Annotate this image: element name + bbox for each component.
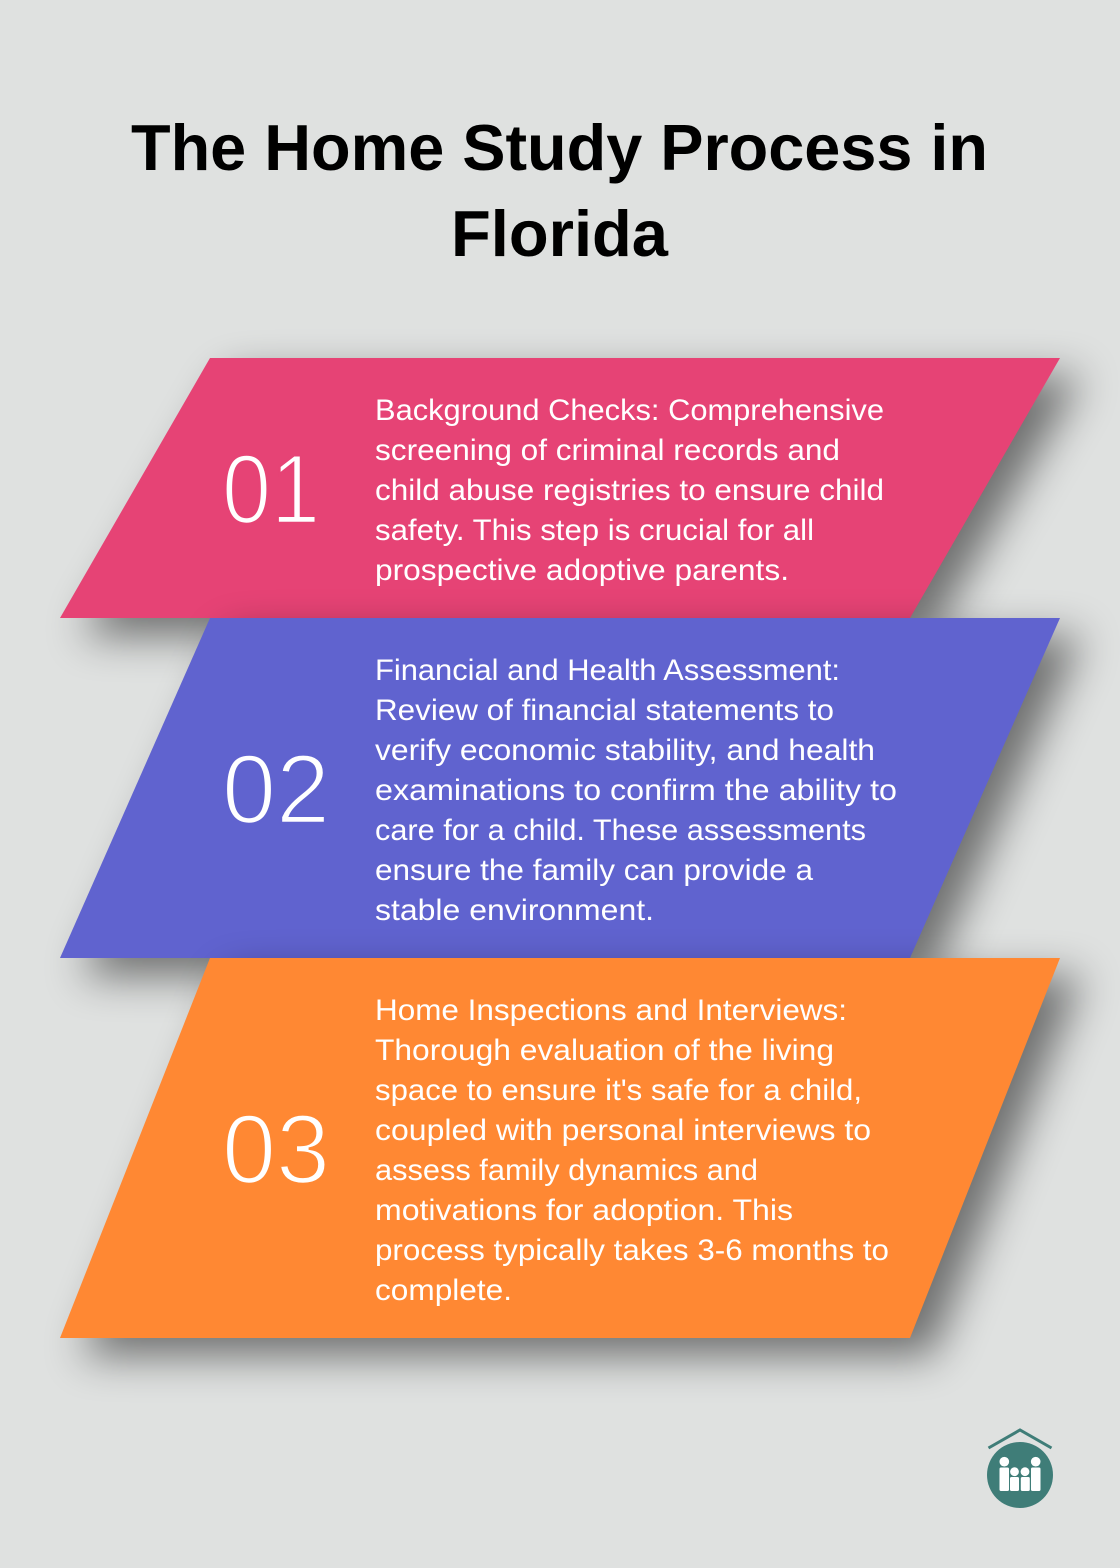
text: step 3 description: Home Inspections and Interviews:: [375, 994, 847, 1027]
text: step 2 description: Financial and Health Assessment:: [375, 654, 840, 687]
shape: blue parallelogram: [60, 618, 1060, 958]
text: step 1 description: prospective adoptive parents.: [375, 554, 789, 587]
text: step 2 description: [375, 654, 897, 927]
shape: pink parallelogram: [60, 358, 1060, 618]
text: step 2 description: examinations to confirm the ability to: [375, 774, 897, 807]
text: step 2 description: stable environment.: [375, 894, 654, 927]
text: step 1 description: safety. This step is crucial for all: [375, 514, 814, 547]
text: step 1 description: [375, 394, 884, 587]
title: The Home Study Process in: [131, 111, 988, 184]
icon: family home logo: [987, 1430, 1053, 1508]
text: step 3 description: space to ensure it's safe for a child,: [375, 1074, 862, 1107]
text: step 3 description: coupled with personal interviews to: [375, 1114, 871, 1147]
panel: step 1 background checks: [60, 358, 1082, 636]
title: Florida: [451, 197, 669, 270]
text: step 2 description: care for a child. These assessments: [375, 814, 866, 847]
text: step 3 description: motivations for adoption. This: [375, 1194, 793, 1227]
text: step 1 description: Background Checks: Comprehensive: [375, 394, 884, 427]
panel: step 2 financial and health assessment: [60, 618, 1082, 976]
text: step 3 description: process typically takes 3-6 months to: [375, 1234, 889, 1267]
text: step 3 description: complete.: [375, 1274, 512, 1307]
text: step 1 description: screening of criminal records and: [375, 434, 840, 467]
shape: orange parallelogram: [60, 958, 1060, 1338]
number 03: 03: [222, 1094, 330, 1204]
panel: step 3 home inspections and interviews: [60, 958, 1082, 1356]
text: step 2 description: verify economic stability, and health: [375, 734, 875, 767]
text: step 2 description: ensure the family can provide a: [375, 854, 813, 887]
number 01: 01: [222, 434, 320, 544]
number 02: 02: [222, 734, 330, 844]
text: step 2 description: Review of financial statements to: [375, 694, 834, 727]
text: step 3 description: [375, 994, 889, 1307]
text: step 3 description: assess family dynamics and: [375, 1154, 758, 1187]
text: step 1 description: child abuse registries to ensure child: [375, 474, 884, 507]
text: step 3 description: Thorough evaluation of the living: [375, 1034, 834, 1067]
title: [131, 111, 988, 270]
